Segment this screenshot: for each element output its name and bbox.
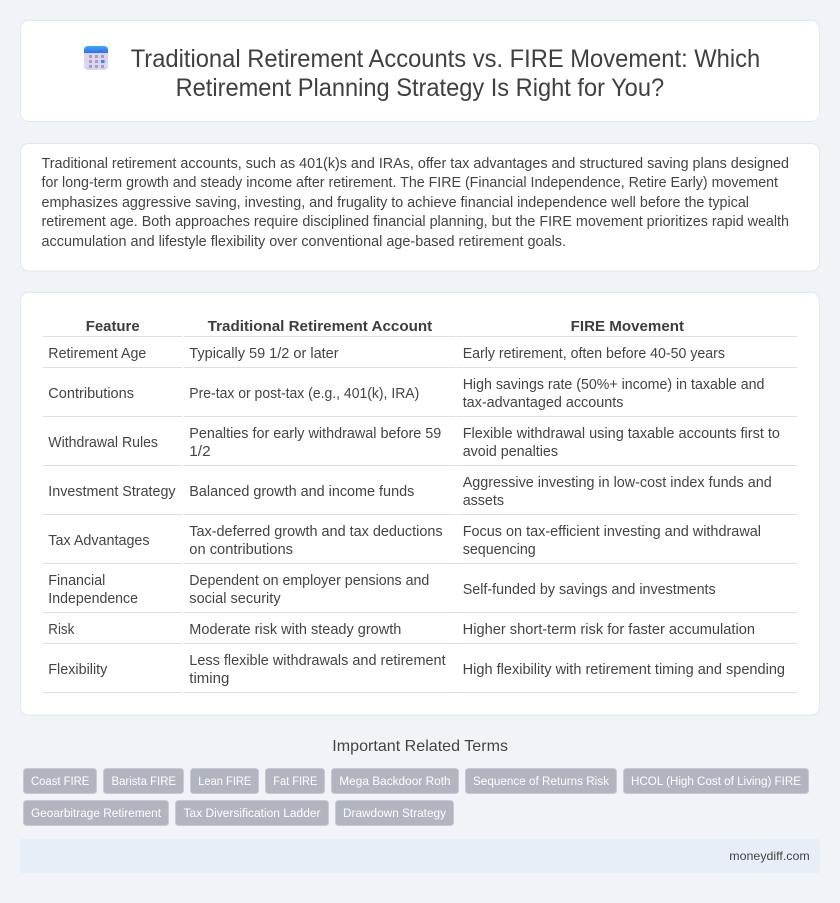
table row: Withdrawal Rules [43,426,797,466]
table row: Withdrawal Rules: Flexible withdrawal using taxable accounts first to [463,426,780,442]
tag: Geoarbitrage Retirement [24,800,168,826]
heading: related terms: Important Related Terms [332,738,508,755]
table row: Risk: Risk [48,622,75,638]
table row: Flexibility: Flexibility [48,662,108,678]
title: Traditional Retirement Accounts vs. FIRE Movement: Which [131,45,760,73]
table row: Flexibility: High flexibility with retirement timing and spending [463,662,785,678]
table row: Investment Strategy: Aggressive investing in low-cost index funds and [463,475,772,491]
tag: Geoarbitrage Retirement: Geoarbitrage Retirement [31,806,162,820]
table row: Retirement Age: Retirement Age [48,346,146,362]
table header row [43,318,797,337]
tag: Sequence of Returns Risk [466,768,616,794]
table row: Withdrawal Rules: 1/2 [189,444,211,460]
table header row: Traditional Retirement Account [208,318,432,335]
icon: calendar [84,46,108,70]
text block: intro paragraph: for long-term growth and steady income after retirement. The FIRE (Financial Independence, Retire Early) movement [42,175,778,191]
table row: Financial Independence: Dependent on employer pensions and [189,573,429,589]
tag: Barista FIRE [104,768,184,794]
table row: Contributions: High savings rate (50%+ income) in taxable and [463,377,764,393]
text block: intro paragraph [42,156,789,250]
table row: Investment Strategy: Balanced growth and income funds [189,484,414,500]
table row: Financial Independence: Self-funded by savings and investments [463,582,716,598]
text block: intro paragraph: Traditional retirement accounts, such as 401(k)s and IRAs, offer tax advantages and structured saving plans designed [42,156,789,172]
table row: Tax Advantages: Tax Advantages [48,533,150,549]
tag: Mega Backdoor Roth: Mega Backdoor Roth [339,774,451,788]
table row: Flexibility [43,653,797,693]
tag: Tax Diversification Ladder [176,800,328,826]
footer: moneydiff.com [729,849,810,863]
table row: Withdrawal Rules: Penalties for early withdrawal before 59 [189,426,441,442]
text block: intro paragraph: accumulation and lifestyle flexibility over conventional age-based retirement goals. [42,234,566,250]
table row: Withdrawal Rules: avoid penalties [463,444,558,460]
table row: Retirement Age: Typically 59 1/2 or later [189,346,339,362]
table row: Tax Advantages: Focus on tax-efficient investing and withdrawal [463,524,761,540]
tag: Tax Diversification Ladder: Tax Diversification Ladder [184,806,320,820]
table row: Risk [43,622,797,644]
tag: Mega Backdoor Roth [332,768,458,794]
tag: Barista FIRE: Barista FIRE [112,774,176,788]
table row: Flexibility: timing [189,671,229,687]
title: Retirement Planning Strategy Is Right for You? [176,74,664,102]
tag: Lean FIRE [190,768,258,794]
table row: Contributions: Pre-tax or post-tax (e.g., 401(k), IRA) [189,386,419,402]
text block: intro paragraph: emphasizes aggressive saving, investing, and frugality to achieve financial independence well before the typical [42,195,749,211]
table row: Flexibility: Less flexible withdrawals and retirement [189,653,446,669]
table row: Tax Advantages: Tax-deferred growth and tax deductions [189,524,443,540]
table row: Contributions: Contributions [48,386,134,402]
table row: Contributions: tax-advantaged accounts [463,395,623,411]
tag: HCOL FIRE: HCOL (High Cost of Living) FIRE [631,774,801,788]
tag: Drawdown Strategy: Drawdown Strategy [343,806,447,820]
tag: Sequence of Returns Risk: Sequence of Returns Risk [473,774,610,788]
table row: Retirement Age [43,346,797,368]
tag list: related terms [24,768,808,826]
panel: comparison table [20,292,820,715]
table row: Tax Advantages [43,524,797,564]
table row: Financial Independence: Independence [48,591,138,607]
table row: Tax Advantages: sequencing [463,542,536,558]
tag: Coast FIRE [24,768,96,794]
table row: Retirement Age: Early retirement, often before 40-50 years [463,346,725,362]
table row: Investment Strategy [43,475,797,515]
table row: Withdrawal Rules: Withdrawal Rules [48,435,158,451]
table row: Investment Strategy: assets [463,493,504,509]
table row: Contributions [43,377,797,417]
table row: Financial Independence: social security [189,591,281,607]
tag: HCOL FIRE [624,768,808,794]
panel: header [20,20,820,122]
tag: Drawdown Strategy [336,800,454,826]
panel: introduction [20,144,820,271]
table row: Financial Independence [43,573,797,613]
table header row: Feature [86,318,140,335]
tag: Lean FIRE: Lean FIRE [198,774,251,788]
table header row: FIRE Movement [571,318,684,335]
footer [20,839,820,873]
table row: Investment Strategy: Investment Strategy [48,484,176,500]
title [131,45,760,102]
table row: Risk: Higher short-term risk for faster accumulation [463,622,755,638]
text block: intro paragraph: retirement age. Both approaches require disciplined financial planning, but the FIRE movement prioritizes rapid wealth [42,214,789,230]
tag: Coast FIRE: Coast FIRE [31,774,89,788]
tag: Fat FIRE [266,768,324,794]
table row: Risk: Moderate risk with steady growth [189,622,401,638]
table row: Tax Advantages: on contributions [189,542,293,558]
tag: Fat FIRE: Fat FIRE [273,774,317,788]
table row: Financial Independence: Financial [48,573,105,589]
